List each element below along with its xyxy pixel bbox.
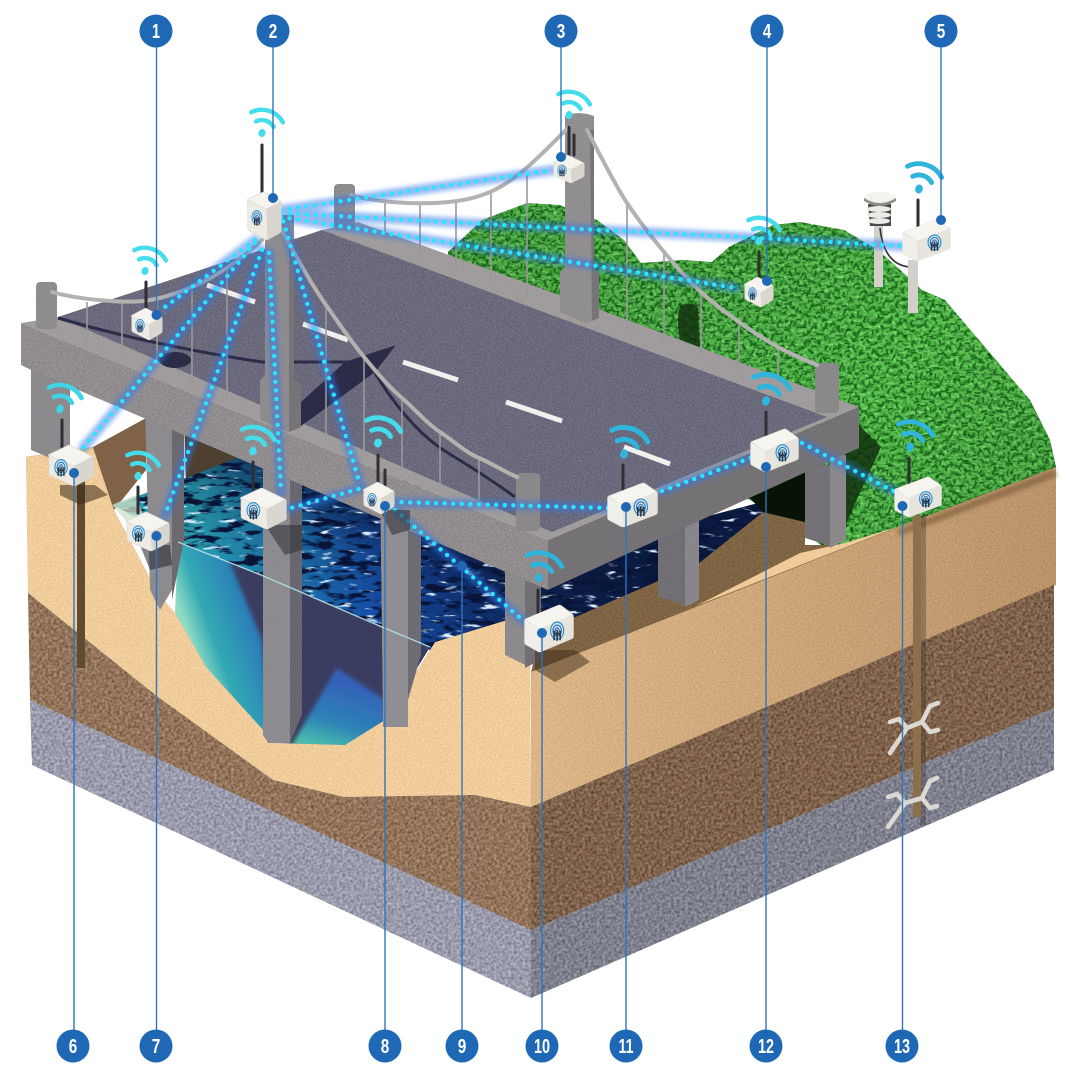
callout 12 [750, 462, 782, 1062]
suspension cables [52, 127, 817, 477]
sensor 11 [605, 423, 657, 527]
sensor 7 [121, 449, 172, 570]
asphalt road [58, 230, 827, 532]
wireless links [83, 170, 903, 622]
sensor 4 [742, 214, 782, 307]
near tower [260, 215, 301, 432]
suspender rods [87, 173, 778, 502]
callout 3 [544, 14, 578, 162]
sand layer left [26, 447, 531, 807]
grey layer right [531, 708, 1054, 998]
bridge deck [21, 222, 859, 590]
left post [36, 282, 57, 329]
ground probe 6 [77, 470, 85, 668]
sensor 5 [900, 159, 950, 261]
brown bank behind piers [26, 418, 262, 510]
mounting pole [908, 260, 918, 313]
far tower [560, 113, 599, 323]
grass edge shadow [898, 473, 1056, 533]
deck front right face [548, 407, 859, 590]
grass shadows [678, 303, 881, 530]
callout 9 [446, 561, 478, 1062]
callout 2 [256, 14, 290, 203]
grass hill [448, 203, 1056, 555]
callout 13: 13 [894, 1036, 910, 1058]
sensor on centre pier [235, 423, 302, 555]
callout 6 [56, 468, 90, 1062]
weather station [864, 192, 918, 313]
callout 11: 11 [618, 1036, 634, 1058]
sensor 10 [520, 548, 590, 682]
brown layer right [531, 585, 1054, 930]
front post [516, 473, 540, 531]
sensor 13 [891, 417, 941, 517]
callout 8 [368, 501, 402, 1062]
callout 10: 10 [534, 1036, 550, 1058]
sensor 2 gateway [245, 106, 285, 240]
brown layer left [28, 593, 531, 930]
callout 10 [526, 628, 558, 1062]
deck front left face [21, 323, 548, 590]
callout 12: 12 [758, 1036, 774, 1058]
right post [815, 363, 839, 413]
callout 4: 4 [763, 21, 772, 43]
callout 5: 5 [937, 21, 945, 43]
sensor 3 [552, 88, 592, 183]
sand layer right [531, 467, 1056, 807]
waterline on piers [178, 542, 430, 647]
sensor 8 [359, 413, 410, 535]
grey layer left [30, 700, 531, 998]
sensor 12 [747, 370, 798, 472]
callout 6: 6 [69, 1036, 77, 1058]
soil block: right face [531, 467, 1056, 998]
deck top concrete [21, 222, 859, 540]
callout 2: 2 [269, 21, 277, 43]
road shadows [58, 318, 515, 497]
callout 1 [140, 14, 172, 320]
ground probe 13 with anchors [888, 515, 938, 827]
road markings [207, 285, 670, 464]
shoreline foam [112, 495, 172, 542]
callout 3: 3 [557, 21, 565, 43]
callout 4 [750, 14, 784, 286]
soil block: left face [26, 447, 531, 998]
sensor 1 [128, 244, 168, 340]
bridge pillars [31, 365, 846, 743]
bridge towers and posts [36, 113, 839, 531]
callout 1: 1 [152, 21, 160, 43]
callout 11 [610, 502, 642, 1062]
back post [334, 184, 355, 230]
callout 9: 9 [458, 1036, 466, 1058]
water surface [112, 456, 770, 655]
callout 8: 8 [381, 1036, 389, 1058]
callout 13 [886, 501, 918, 1062]
sand surface under bridge [531, 468, 900, 672]
callout 5 [924, 14, 958, 225]
underwater cross section [175, 542, 440, 750]
callout 7 [140, 531, 172, 1062]
sensor 6 [42, 381, 108, 505]
callout 7: 7 [152, 1036, 160, 1058]
